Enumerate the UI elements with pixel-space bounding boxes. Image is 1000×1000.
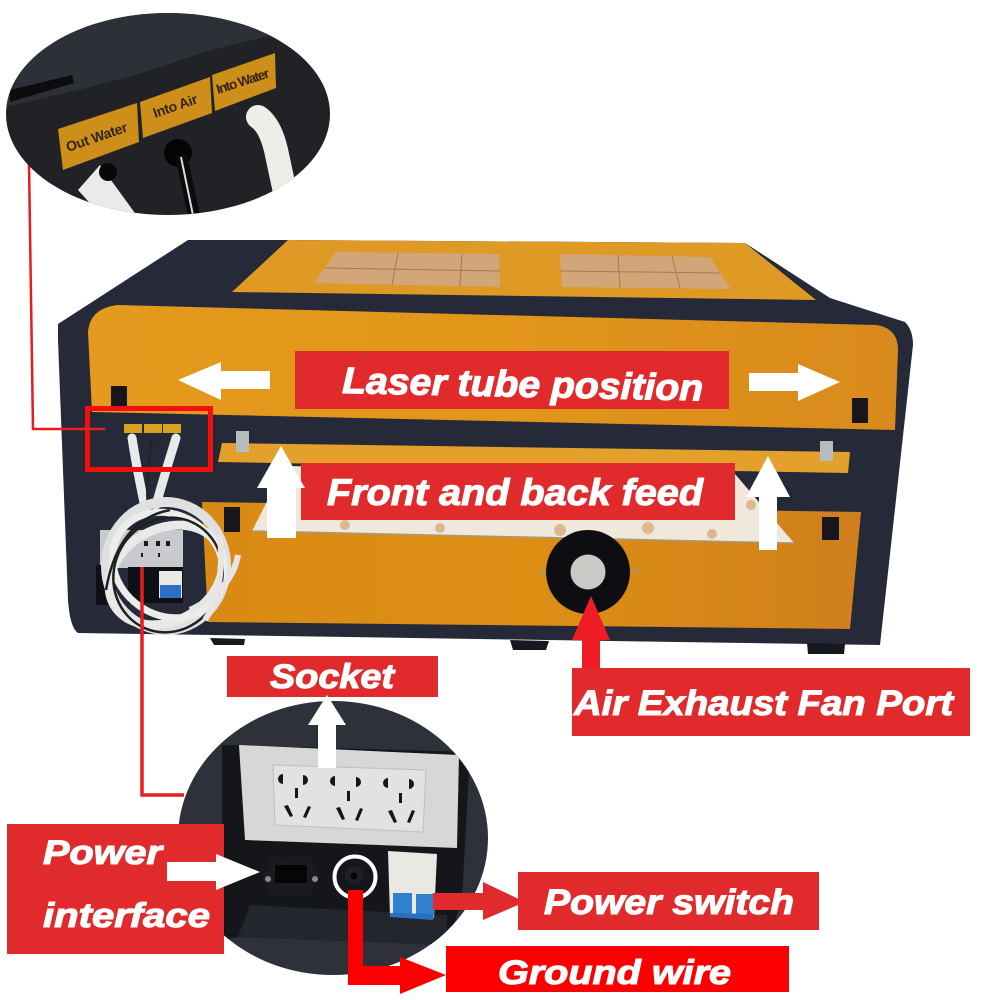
laser machine body — [58, 240, 913, 654]
connector labels small — [124, 424, 181, 433]
acrylic window left — [314, 252, 500, 287]
label: front and back feed: Front and back feed — [327, 472, 704, 513]
socket plate — [239, 745, 459, 848]
recess — [222, 745, 470, 945]
label: laser tube position: Laser tube position — [342, 360, 704, 409]
leader line: top inset — [29, 164, 105, 429]
label: laser tube position — [295, 351, 729, 409]
lower door latch right — [822, 517, 839, 540]
hinge left — [236, 431, 249, 452]
socket holes — [278, 774, 415, 823]
inset: power panel — [178, 701, 488, 975]
machine cabinet — [58, 240, 913, 645]
label: power interface: interface — [43, 897, 210, 935]
label: socket — [227, 656, 438, 697]
water tubes — [132, 438, 176, 512]
wall panel with socket and breaker behind coil — [96, 530, 183, 605]
arrow: feed right — [746, 456, 790, 550]
arrow: tube right — [749, 364, 840, 401]
wood sheet — [252, 466, 794, 543]
label: front and back feed — [301, 463, 735, 520]
label: ground wire — [446, 946, 789, 992]
arrow: ground wire — [348, 890, 446, 994]
hinge right — [820, 441, 833, 461]
outlet holes — [141, 541, 170, 557]
arrow: tube left — [178, 362, 270, 400]
red highlight frame — [88, 408, 210, 470]
label: power interface: Power — [43, 834, 164, 872]
lid latch left — [111, 386, 127, 410]
label: into air: Into Air — [151, 91, 200, 121]
label: out water — [58, 103, 139, 170]
lower door latch left — [224, 507, 240, 532]
leader line: bottom inset — [142, 567, 184, 795]
arrow: socket — [308, 695, 346, 768]
air wire — [181, 155, 196, 225]
arrow: power interface — [167, 854, 260, 890]
coiled tubing — [91, 491, 244, 650]
lower door — [202, 502, 861, 629]
feed door strip — [218, 443, 850, 473]
tube: out water — [78, 165, 135, 213]
tube: into water — [258, 117, 292, 225]
label: air exhaust fan port — [572, 668, 970, 736]
breaker — [388, 851, 437, 920]
label: into air — [140, 77, 212, 138]
inset: water and air ports — [6, 13, 330, 215]
arrow: feed left — [257, 446, 305, 538]
ground post — [345, 866, 363, 884]
arrow: fan port — [572, 596, 610, 668]
feet — [210, 638, 845, 654]
lid latch right — [852, 398, 868, 423]
label: power interface — [7, 824, 224, 954]
label: power switch: Power switch — [544, 883, 794, 922]
arrow: power switch — [433, 882, 525, 920]
top cover panel — [232, 240, 816, 300]
front lid — [88, 305, 898, 430]
label: power switch — [518, 872, 819, 930]
label: into water: Into Water — [214, 65, 272, 97]
label: air exhaust fan port: Air Exhaust Fan Port — [573, 684, 954, 723]
exhaust fan — [541, 530, 637, 614]
label: ground wire: Ground wire — [498, 954, 731, 992]
air hole — [164, 139, 192, 167]
label: socket: Socket — [270, 658, 396, 696]
label: into water — [212, 53, 276, 111]
ground highlight ring — [334, 856, 376, 898]
label: out water: Out Water — [64, 119, 130, 155]
acrylic window right — [560, 254, 731, 289]
power inlet — [265, 865, 318, 883]
